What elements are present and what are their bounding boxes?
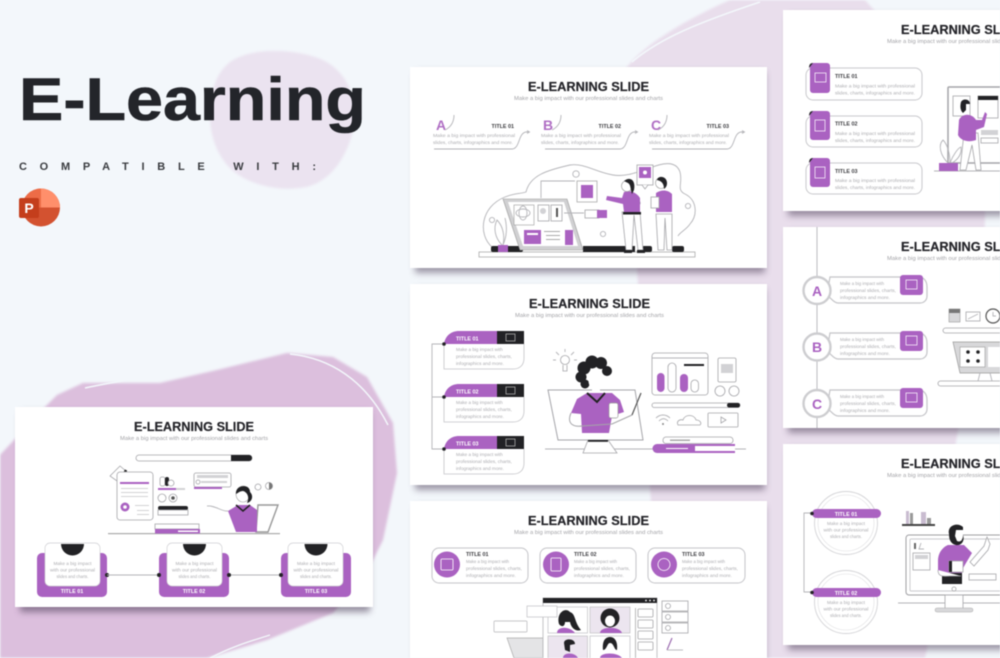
title: E-Learning <box>19 66 366 133</box>
card: title 02: TITLE 02 <box>183 589 205 595</box>
illustration: person in monitor with app widgets <box>545 349 746 453</box>
card: title 01: TITLE 01 <box>61 589 83 595</box>
step C <box>649 115 744 149</box>
card: title 03: Make a big impact with <box>682 559 725 564</box>
card: title 01: infographics and more. <box>456 361 504 366</box>
step B <box>804 331 927 360</box>
card: title 02: professional slides, charts, <box>574 566 630 571</box>
card: title 02: Make a big impact with professional <box>835 131 915 136</box>
heading: E-LEARNING SLIDE <box>134 419 254 434</box>
illustration: certificate and learner <box>108 466 280 534</box>
step B: Make a big impact with professional <box>541 133 621 138</box>
icon: PowerPoint logo <box>19 188 60 226</box>
card: title 03: professional slides, charts, <box>456 459 512 464</box>
card: title 03: with our professional <box>294 568 338 572</box>
illustration: person at board <box>934 87 1000 171</box>
card: title 02 <box>442 384 524 422</box>
card: title 01 <box>37 543 109 597</box>
step B: B <box>812 339 822 355</box>
subheading: Make a big impact with our professional slides and charts <box>514 530 664 536</box>
brush blob behind heading <box>210 51 355 189</box>
card: title 02 <box>157 543 231 597</box>
card: title 02: Make a big impact <box>176 561 214 566</box>
card: title 03: TITLE 03 <box>682 552 704 558</box>
card: title 03: professional slides, charts, <box>682 566 738 571</box>
card: title 01: TITLE 01 <box>456 336 478 342</box>
step A: A <box>436 117 446 133</box>
card: title 02: with our professional <box>824 606 868 612</box>
card: title 03 <box>442 436 524 474</box>
card: title 03: TITLE 03 <box>835 169 857 175</box>
step B: slides, charts, infographics and more. <box>541 140 619 145</box>
step A: Make a big impact with professional <box>433 133 515 138</box>
card: title 01 <box>432 548 528 583</box>
card: title 02: TITLE 02 <box>574 552 596 558</box>
card: title 01: slides, charts, infographics and more. <box>835 90 915 96</box>
card: title 02: infographics and more. <box>456 414 504 419</box>
card: title 01: professional slides, charts, <box>456 354 512 359</box>
card: title 03: Make a big impact with <box>456 452 503 457</box>
step C: Make a big impact with professional <box>649 133 729 138</box>
step C: Make a big impact with <box>840 394 884 399</box>
step C: professional slides, charts, <box>840 401 896 406</box>
card: title 03: infographics and more. <box>682 573 732 578</box>
illustration: teacher in monitor <box>898 511 1000 612</box>
card: title 02: Make a big impact with <box>574 559 617 564</box>
illustration: video call window <box>494 598 688 658</box>
step A: TITLE 01 <box>492 124 514 130</box>
card: title 01 <box>442 331 524 369</box>
subheading: Make a big impact with our professional slides and charts <box>514 96 664 102</box>
card: title 01: Make a big impact with <box>456 347 503 352</box>
card: title 01: infographics and more. <box>466 573 516 578</box>
card: title 03 <box>279 543 351 597</box>
card: title 01: Make a big impact with <box>466 559 509 564</box>
card: title 01: TITLE 01 <box>466 552 488 558</box>
card: title 01: TITLE 01 <box>835 74 857 80</box>
card: title 03: slides, charts, infographics and more. <box>835 185 915 190</box>
step A: Make a big impact with <box>840 281 884 286</box>
step C: TITLE 03 <box>707 124 729 130</box>
card: title 02 <box>806 111 922 147</box>
card: title 01: Make a big impact <box>827 521 866 526</box>
subheading: Make a big impact with our professional slides and charts <box>120 436 269 442</box>
card: title 01 <box>810 492 881 554</box>
card: title 03: Make a big impact <box>297 561 336 566</box>
panel: right slide three <box>783 444 1000 650</box>
step A: slides, charts, infographics and more. <box>433 140 513 145</box>
card: title 01 <box>806 63 922 100</box>
card: title 03: infographics and more. <box>456 466 504 471</box>
step A <box>433 115 530 149</box>
card: title 02: with our professional <box>172 568 217 572</box>
connector <box>804 513 811 592</box>
brush stroke top right <box>625 0 985 658</box>
card: title 02: Make a big impact <box>827 600 866 605</box>
card: title 02: infographics and more. <box>574 573 624 578</box>
timeline line <box>816 227 818 428</box>
card: title 03 <box>806 158 922 194</box>
connector <box>107 574 281 576</box>
card: title 03: TITLE 03 <box>305 589 327 595</box>
step B: infographics and more. <box>840 351 890 356</box>
step C: slides, charts, infographics and more. <box>649 140 727 145</box>
card: title 02 <box>810 570 881 634</box>
card: title 02: slides and charts. <box>830 613 862 618</box>
search bar <box>136 455 252 461</box>
panel: slide three cards and video call <box>410 501 767 658</box>
step A <box>804 275 927 304</box>
panel: slide title list and person <box>410 284 767 490</box>
card: title 01: professional slides, charts, <box>466 566 522 571</box>
heading: E-LEARNING SLIDE <box>528 79 649 94</box>
card: title 02: TITLE 02 <box>835 591 857 597</box>
card: title 01: with our professional <box>50 568 95 572</box>
card: title 03: Make a big impact with professional <box>835 178 915 183</box>
card: title 02 <box>540 548 636 583</box>
card: title 03 <box>648 548 745 583</box>
card: title 03: TITLE 03 <box>456 442 478 448</box>
panel: right slide two <box>783 227 1000 433</box>
card: title 01: Make a big impact <box>54 561 92 566</box>
step C <box>804 388 927 417</box>
panel: slide A B C <box>410 67 767 273</box>
card: title 02: slides and charts. <box>178 574 210 579</box>
step C: infographics and more. <box>840 408 890 413</box>
card: title 01: TITLE 01 <box>835 512 857 518</box>
card: title 02: slides, charts, infographics and more. <box>835 138 915 143</box>
step B: Make a big impact with <box>840 337 884 342</box>
panel: left slide <box>15 407 373 612</box>
hair and face <box>576 356 612 393</box>
heading: E-LEARNING SLIDE <box>528 513 649 528</box>
card: title 02: professional slides, charts, <box>456 407 512 412</box>
icon: PowerPoint logo: P <box>24 200 34 216</box>
step C: C <box>651 117 661 133</box>
heading: E-LEARNING SLIDE <box>529 296 650 311</box>
illustration: desktop and widgets <box>938 309 1000 386</box>
card: title 02: TITLE 02 <box>835 122 857 128</box>
step A: A <box>812 283 822 299</box>
subheading: Make a big impact with our professional slides and charts <box>515 313 665 319</box>
card: title 01: slides and charts. <box>830 534 862 539</box>
step B: B <box>543 117 553 133</box>
card: title 01: slides and charts. <box>56 574 88 579</box>
step B <box>541 115 638 149</box>
subtitle: compatible with: COMPATIBLE WITH: <box>19 161 316 173</box>
card: title 01: with our professional <box>824 528 868 532</box>
card: title 02: Make a big impact with <box>456 400 503 405</box>
card: title 01: Make a big impact with professional <box>835 84 915 88</box>
step B: TITLE 02 <box>599 124 621 130</box>
brush stroke bottom left <box>0 353 397 658</box>
step C: C <box>812 396 822 412</box>
card: title 02: TITLE 02 <box>456 390 478 396</box>
panel: right slide one <box>783 10 1000 216</box>
step A: professional slides, charts, <box>840 288 896 293</box>
step B: professional slides, charts, <box>840 344 896 349</box>
illustration: laptop and two learners <box>479 164 695 257</box>
step A: infographics and more. <box>840 295 890 300</box>
card: title 03: slides and charts. <box>300 574 332 579</box>
connector <box>432 344 444 449</box>
